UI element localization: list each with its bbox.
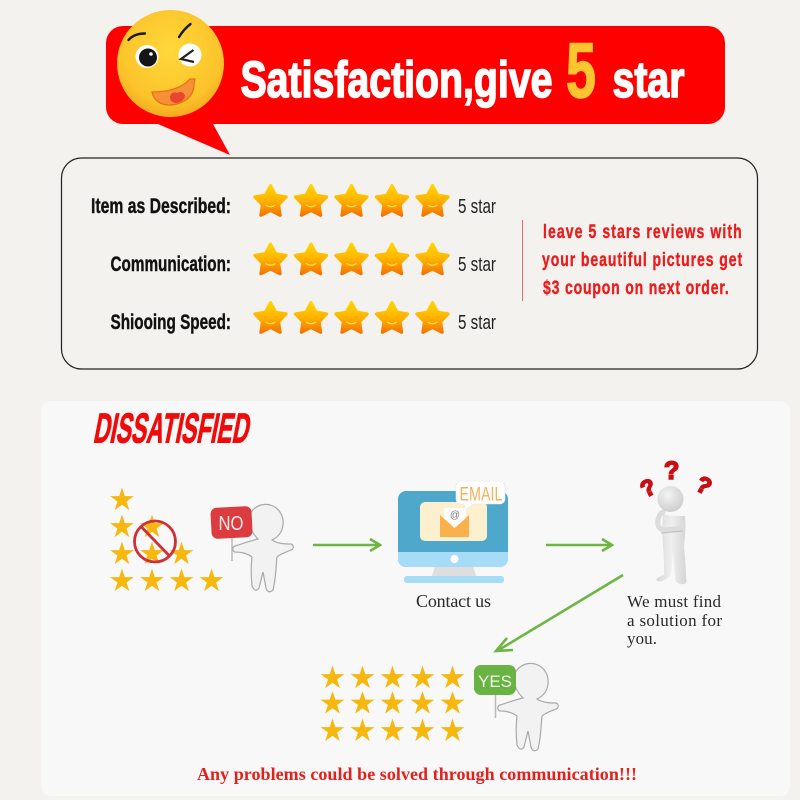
footer message: Any problems could be solved through communication!!!	[197, 764, 637, 784]
rating row: item as described: 5 star	[458, 196, 496, 218]
rating row: shipping speed: Shiooing Speed:	[110, 311, 231, 334]
callout: coupon offer: $3 coupon on next order.	[543, 277, 729, 299]
icon: winking emoji	[117, 10, 224, 117]
rating row: shipping speed	[110, 302, 496, 334]
title text: 5	[566, 26, 596, 114]
rating row: communication: 5 star	[458, 254, 496, 276]
arrow: to contact	[313, 539, 380, 551]
title text: Satisfaction,give	[240, 51, 552, 108]
banner: title speech bubble	[106, 10, 725, 155]
arrow: back to five stars	[496, 575, 623, 651]
icon: email monitor: EMAIL	[460, 484, 502, 506]
icon: thinking figure with question marks: ?	[636, 473, 660, 503]
callout: coupon offer: leave 5 stars reviews with	[543, 221, 742, 243]
icon: figure with NO sign: NO	[218, 513, 244, 535]
icon: figure with NO sign	[210, 504, 293, 592]
icon: thinking figure with question marks: ?	[664, 457, 679, 485]
text: we must find a solution	[627, 592, 722, 648]
icon: thinking figure with question marks: ?	[692, 470, 716, 500]
banner bubble shape	[106, 26, 725, 155]
step: low rating stars	[110, 488, 223, 591]
icon: figure with YES sign	[474, 663, 558, 751]
panel: dissatisfied process	[41, 401, 790, 796]
callout: coupon offer	[542, 221, 742, 299]
label: contact us: Contact us	[416, 591, 491, 611]
heading: dissatisfied: DISSATISFIED	[91, 405, 255, 451]
figure body	[656, 514, 687, 584]
callout: coupon offer: your beautiful pictures get	[542, 249, 742, 271]
text: we must find a solution: a solution for	[627, 611, 722, 630]
rating row: communication	[110, 244, 496, 276]
icon: thinking figure with question marks	[636, 457, 716, 584]
title text	[240, 26, 685, 114]
icon: prohibition sign	[134, 521, 176, 562]
five star rows	[321, 666, 464, 741]
icon: email monitor	[398, 481, 508, 583]
icon: figure with YES sign: YES	[478, 672, 512, 691]
text: we must find a solution: you.	[627, 629, 657, 648]
title text: star	[612, 51, 685, 108]
arrow: to solution	[546, 539, 612, 551]
rating row: item as described	[91, 186, 496, 218]
rating row: item as described: Item as Described:	[91, 195, 231, 218]
panel: ratings card	[62, 158, 758, 369]
icon: email monitor: @	[450, 510, 460, 521]
rating row: communication: Communication:	[110, 253, 231, 276]
rating row: shipping speed: 5 star	[458, 312, 496, 334]
text: we must find a solution: We must find	[627, 592, 722, 611]
